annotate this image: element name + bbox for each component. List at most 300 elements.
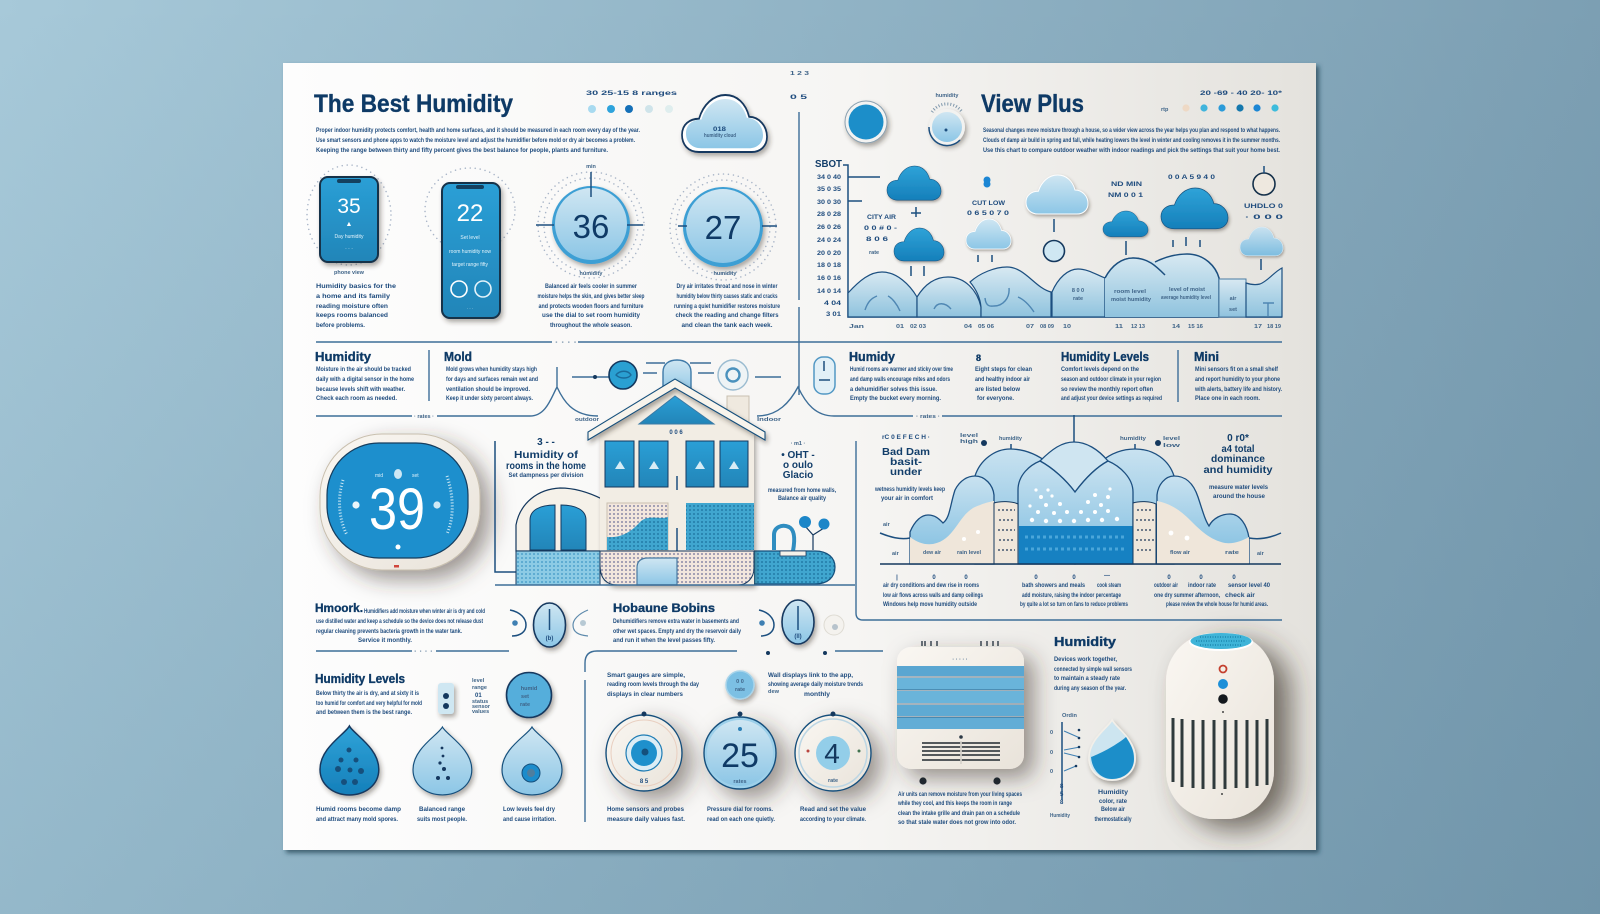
callout: humidity of rooms: rooms in the home [506,461,586,472]
connector curves: · rates · [414,414,434,420]
text block: Mold [444,349,538,402]
chart: humidity domes: outdoor air [1154,582,1178,589]
legend: humidity scale right: 20 -69 - 40 20- 10* [1200,91,1283,97]
pool [754,551,835,584]
text block: Humidy: Empty the bucket every morning. [850,395,941,402]
icon: pill sensor right [759,600,844,644]
device: air conditioner: · · · · · [952,657,968,663]
frame: lower middle [585,651,883,822]
chart: humidity domes: wetness humidity levels keep [874,486,945,493]
button icon [845,101,887,143]
centre line and ticks [1011,415,1135,449]
y axis labels: 28 0 28 [817,212,842,218]
callout: right of house: Balance air quality [778,495,826,502]
text block: Moisture: use distilled water and keep a schedule so the device does not release dust [316,618,484,625]
y axis labels: 24 0 24 [817,238,842,244]
text block: Humidity Levels lower: Below thirty the air is dry, and at sixty it is [316,690,419,697]
captions: dials: measure daily values fast. [607,816,685,823]
chart: humidity domes: low air flows across walls and damp ceilings [883,592,983,599]
chart: humidity domes: your air in comfort [881,495,934,502]
chart: humidity domes: rate [1225,550,1239,556]
caption: dial 27 [674,283,780,329]
dial 36: humidity [580,271,603,277]
caption: drop: color, rate [1099,798,1127,805]
chart: humidity domes: dominance [1211,454,1265,465]
chart: humidity domes: cook steam [1097,582,1121,589]
callout: humidity of rooms: 3 - - [537,437,555,448]
chart: humidity domes: sensor level 40 [1228,582,1270,589]
text block: Humidity Levels: season and outdoor climate in your region [1061,376,1161,383]
hills [848,272,917,317]
caption: dial 36: and protects wooden floors and furniture [538,303,644,310]
house illustration: 0 0 6 [669,430,683,436]
chart: weather clouds and humidity area: rate [869,250,879,256]
device: air conditioner [897,641,1024,785]
intro text right [983,127,1280,154]
dial 27: humidity [714,271,737,277]
text pair with mini gauge: reading room levels through the day [607,681,699,688]
icon: pill sensor left: (b) [546,636,553,642]
text block: Moisture: regular cleaning prevents bacteria growth in the water tank. [316,628,462,635]
left chart text: rC 0 E F E C H · [882,435,930,441]
dial 36 [536,164,644,278]
caption: dial 27: humidity below thirty causes static and cracks [676,293,778,300]
captions: drops: Humid rooms become damp [316,806,401,813]
scale: drop level: 5 [1060,792,1064,798]
caption: dial 27: check the reading and change filters [676,312,779,319]
text block: Humidity Levels: Humidity Levels [1061,349,1149,364]
chart: weather clouds and humidity area: UHDLO 0 [1244,204,1284,210]
caption: dial 27: running a quiet humidifier restores moisture [674,303,780,310]
chart: weather clouds and humidity area: 0 0 A 5 9 4 0 [1168,175,1216,181]
text pair with mini gauge: Wall displays link to the app, [768,672,853,679]
chart: humidity domes: 0 [1034,575,1038,581]
house illustration [516,379,835,585]
right chart text: 0 r0* [1227,433,1249,444]
chart: weather clouds and humidity area: 17 [1254,324,1262,330]
chart: weather clouds and humidity area: 12 13 [1131,324,1145,330]
chart: humidity domes: Bad Dam [882,447,930,458]
chart: humidity domes: — [1104,573,1110,579]
chart: humidity domes: high [960,439,979,445]
icon: round meter: set [521,694,529,700]
roof [588,379,765,440]
connector curves [316,367,1282,423]
y axis labels: 20 0 20 [817,251,842,257]
chart: humidity domes: 0 [932,575,936,581]
chart: humidity domes: rain level [957,550,981,556]
caption: drop: thermostatically [1094,816,1132,823]
lower panels [607,503,668,550]
y axis labels: 16 0 16 [817,276,842,282]
connector curves: Indoor [757,417,782,423]
icon: phone tall: · · · [466,306,474,311]
callout: right of house: · m1 · [791,441,806,447]
icon: small sensor: level [472,678,485,684]
chart: weather clouds and humidity area [815,159,1284,330]
text block: Mold: Keep it under sixty percent always. [446,395,533,402]
text block: Humidity Levels: so review the monthly report often [1061,386,1153,393]
text block: 8: 8 [976,353,981,363]
text block: Humidity: because levels shift with weather. [316,386,405,393]
caption: phone small: a home and its family [316,293,390,300]
connector curves: outdoor [575,417,600,423]
y axis labels: 35 0 35 [817,187,842,193]
captions: drops: and cause irritation. [503,816,556,823]
text block: Humidy [849,349,953,402]
dial 36: min [586,164,597,170]
text block: Humidy: and damp walls encourage mites and odors [850,376,950,383]
scale: drop level: 8 [1060,800,1064,806]
dial: eye [606,712,682,791]
x axis labels: Jan [849,324,865,330]
dial: four [795,712,871,791]
vertical divider small [428,350,430,401]
cloud labels: CITY AIR [867,215,897,221]
icon: small sensor: status [472,699,488,705]
divider top centre: 1 2 3 [790,71,809,77]
chart: weather clouds and humidity area: CUT LOW [972,201,1005,207]
chart: humidity domes: a4 total [1222,444,1255,455]
chart: weather clouds and humidity area: 15 16 [1188,324,1203,330]
chart: humidity domes: low [1163,443,1181,449]
caption: phone small: reading moisture often [316,303,388,310]
icon: phone small: Day humidity [335,234,364,240]
caption: dial 27: Dry air irritates throat and nose in winter [676,283,778,290]
text block: Mold: Mold [444,349,472,364]
chart: weather clouds and humidity area: moist humidity [1111,297,1152,303]
chart: humidity domes: air [1257,551,1265,557]
caption: phone small: Humidity basics for the [316,283,396,290]
chart: humidity domes: add moisture, raising the indoor percentage [1022,592,1121,599]
rain arrows and small icons [911,207,1261,276]
text block: Humidity: Check each room as needed. [316,395,397,402]
chart: humidity domes: 0 [964,575,968,581]
chart: humidity domes: 0 [1199,575,1203,581]
chart: weather clouds and humidity area: 04 [964,324,973,330]
icon: round meter: rate [520,702,530,708]
text block: 8: Eight steps for clean [975,366,1032,373]
text block: Moisture [315,601,485,644]
chart: humidity domes: dew air [923,550,942,556]
drop: dark [320,726,379,795]
icon: small sensor: values [472,709,489,715]
y axis labels: 26 0 26 [817,225,842,231]
text block: Mold: ventilation should be improved. [446,386,530,393]
sun dial icon [1044,240,1064,262]
left mid hill [910,476,994,564]
text block: Humidity Levels lower: and between them is the best range. [316,709,412,716]
scale: drop level: Humidity [1050,813,1071,819]
text pair with mini gauge: showing average daily moisture trends [768,681,863,688]
text block: Moisture: Humidifiers add moisture when winter air is dry and cold [364,608,485,615]
text block: Humidity: Humidity [315,349,372,364]
text pair with mini gauge: Smart gauges are simple, [607,672,685,679]
centre arch [1018,461,1133,564]
icon: phone tall: target range fifty [452,262,489,268]
text block: Hobaune Bobins: other wet spaces. Empty and dry the reservoir daily [613,628,741,635]
icon: round meter [506,672,552,718]
text block: Humidity Levels lower: Humidity Levels [315,671,405,686]
clouds [887,166,941,200]
y axis labels: 14 0 14 [817,289,842,295]
text block: Hobaune Bobins: Hobaune Bobins [613,601,715,615]
chart: weather clouds and humidity area: 01 [896,324,904,330]
chart: weather clouds and humidity area: ND MIN [1111,182,1142,188]
heading: View Plus: View Plus [981,90,1084,118]
callout: humidity of rooms: Set dampness per division [508,472,584,479]
device: humidifier [1166,633,1274,819]
callout: right of house: • OHT - [781,450,815,461]
text block: Mini: Mini [1194,349,1219,364]
text block: Hobaune Bobins: and run it when the level passes fifty. [613,637,715,644]
chart: humidity domes: Windows help move humidity outside [883,601,977,608]
y axis labels [815,159,842,318]
text block: Hobaune Bobins: Dehumidifiers remove extra water in basements and [613,618,739,625]
caption: drop [1094,789,1132,823]
caption: phone small [316,283,396,329]
icon: small sensor: 01 [475,693,482,699]
captions: drops: suits most people. [417,816,467,823]
chart: weather clouds and humidity area: 02 03 [910,324,926,330]
chart: weather clouds and humidity area: 07 [1026,324,1034,330]
icon: cloud badge: 018 [713,127,727,133]
frame line around mountain chart [495,441,1282,620]
icon: phone small: phone view [334,270,365,276]
y axis labels: 30 0 30 [817,200,842,206]
callout: right of house [768,441,836,502]
scale: drop level: 0 [1050,750,1053,756]
chart: weather clouds and humidity area: 14 [1172,324,1181,330]
chart: weather clouds and humidity area: · 0 0 0 [1245,215,1284,221]
intro text left: Keeping the range between thirty and fifty percent gives the best balance for people, plants and furniture. [316,147,608,154]
chart: weather clouds and humidity area: 11 [1115,324,1123,330]
caption: air conditioner: while they cool, and this keeps the room in range [897,800,1012,807]
drop: light one [413,727,472,795]
chart: humidity domes: please review the whole house for humid areas. [1166,601,1268,608]
caption: phone small: before problems. [316,322,365,329]
right pillar [1133,502,1156,564]
plant [774,526,794,551]
right mid hill [1157,476,1249,564]
text pair with mini gauge: rate [735,687,745,693]
icon: phone tall: Set level [460,235,480,241]
connector curves: · rates · [916,414,940,420]
text block: 8: and healthy indoor air [975,376,1030,383]
scale: drop level [1050,713,1080,819]
text pair with mini gauge: dew [768,689,780,695]
chart: weather clouds and humidity area: rate [1073,296,1083,302]
dial: eye: 8 5 [640,779,649,785]
chart: weather clouds and humidity area: 0 0 # 0 - [864,226,897,232]
chart: humidity domes: air [892,551,900,557]
wing lines [880,533,1281,539]
legend: humidity scale right [1161,91,1283,113]
body [600,388,754,585]
text block: 8: for everyone. [977,395,1014,402]
y axis labels: 18 0 18 [817,263,842,269]
caption: drop: Below air [1101,806,1125,813]
icon: phone small [307,165,391,276]
thermostat 39: 39 [369,477,425,542]
text pair with mini gauge: monthly [804,691,830,698]
text block: Humidity Levels: Comfort levels depend on the [1061,366,1139,373]
text block: Mold: Mold grows when humidity stays high [446,366,537,373]
text block: Humidity: daily with a digital sensor in the home [316,376,414,383]
drop: level indicator [1089,720,1135,780]
text block: Humidity [315,349,414,402]
callout: humidity of rooms: Humidity of [514,450,579,461]
chart: humidity domes: level [1163,436,1181,442]
text block: Humidity: Moisture in the air should be tracked [316,366,411,373]
text block: Humidity right: connected by simple wall sensors [1054,666,1132,673]
caption: air conditioner: so that stale water does not grow into odor. [898,819,1016,826]
left pillar [994,502,1018,564]
captions: dials [607,806,866,823]
caption: dial 36: use the dial to set room humidity [542,312,640,319]
chart: humidity domes: 0 [1167,575,1171,581]
text block: Humidity right: Devices work together, [1054,656,1117,663]
back domes [975,449,1075,564]
scale: drop level: 0 [1050,769,1053,775]
divider top centre [790,71,809,101]
text block: Mini: Mini sensors fit on a small shelf [1195,366,1279,373]
text block: Humidy: Humid rooms are warmer and sticky over time [850,366,953,373]
chart: humidity domes: by quite a lot so turn on fans to reduce problems [1020,601,1128,608]
caption: dial 27: and clean the tank each week. [682,322,773,329]
chart: weather clouds and humidity area: 0 6 5 0 7 0 [967,211,1010,217]
intro text left: Use smart sensors and phone apps to watch the moisture level and adjust the humidifier before mold or dry air becomes a problem. [316,137,635,144]
text block: Mini: with alerts, battery life and history. [1194,386,1282,393]
icons row above house [572,357,835,395]
icon: phone tall: room humidity now [449,249,491,255]
text block: Mold: for days and surfaces remain wet and [446,376,538,383]
caption: air conditioner: Air units can remove moisture from your living spaces [898,791,1022,798]
y axis labels: 3 01 [826,312,842,318]
caption: dial 36: throughout the whole season. [550,322,632,329]
chart: humidity domes: 0 [1232,575,1236,581]
thermostat 39: mid [375,473,383,479]
chart: weather clouds and humidity area: room level [1114,289,1147,295]
dial: 25: 25 [721,737,759,775]
dots on beige [976,530,980,534]
thermostat 39: set [412,473,419,479]
horizontal rule upper: · · · · [555,340,577,346]
icon: phone tall [425,168,515,318]
dial: four: rate [828,778,838,784]
white droplets [1028,487,1119,523]
chart: humidity domes: check air [1225,592,1256,599]
hill marks [865,288,1274,316]
chart: humidity domes: basit- [890,457,922,468]
text block: Mini: Place one in each room. [1195,395,1260,402]
icon: phone small: ▲ [346,221,352,228]
rule lower left: · · · · [414,649,433,655]
text block: Moisture: Service it monthly. [358,637,412,644]
text block: Humidity right: Humidity [1054,634,1117,649]
legend: humidity scale right: rtp [1161,107,1169,113]
dial: four: 4 [824,738,840,769]
callout: right of house: Glacio [783,470,813,481]
captions: dials: Read and set the value [800,806,866,813]
icon: phone small: 35 [337,195,361,218]
text pair with mini gauge [607,671,863,699]
caption: air conditioner [897,791,1022,826]
icon: phone tall: 22 [457,200,483,227]
chart: weather clouds and humidity area: 08 09 [1040,324,1054,330]
dial: 25: rates [733,779,747,785]
thermostat 39 [320,434,480,570]
captions: dials: Pressure dial for rooms. [707,806,773,813]
chart: weather clouds and humidity area: air [1230,296,1237,302]
icon: small sensor: range [472,685,487,691]
text block: Humidy: a dehumidifier solves this issue. [850,386,937,393]
chart: weather clouds and humidity area: 18 19 [1267,324,1281,330]
chart: weather clouds and humidity area: 10 [1063,324,1071,330]
captions: dials: Home sensors and probes [607,806,684,813]
legend: humidity scale left: 30 25-15 8 ranges [586,91,678,97]
chart: humidity domes: under [890,467,922,478]
intro text left: Proper indoor humidity protects comfort, health and home surfaces, and it should be measured in each room every day of the year. [316,127,640,134]
chart: humidity domes: flow air [1170,550,1191,556]
text block: Humidity right [1054,634,1132,692]
captions: dials: according to your climate. [800,816,866,823]
icon: phone small: · · · [345,246,353,252]
text block: 8 [975,353,1032,402]
y axis labels: 4 04 [824,301,842,307]
text block: Hobaune Bobins [613,601,741,644]
icon: pill sensor left [510,603,588,647]
chart: weather clouds and humidity area: 8 0 0 [1072,288,1084,294]
small dial icon [929,93,965,146]
icon: small sensor [438,678,491,715]
icon: cloud badge: humidity cloud [704,133,736,139]
legend: humidity scale left [586,91,678,113]
axes [843,165,1282,317]
upper windows [605,441,634,487]
intro text right: Clouds of damp air build in spring and fall, while heating lowers the level in winter and cooling removes it in the summer months. [983,137,1280,144]
water text specks [1025,537,1125,549]
dial 36: 36 [573,208,609,245]
caption: dial 36 [538,283,645,329]
title: The Best Humidity [314,90,513,118]
text block: Humidity Levels: and adjust your device settings as required [1061,395,1162,402]
caption: drop: Humidity [1098,789,1128,796]
intro text right: Seasonal changes move moisture through a house, so a wider view across the year helps you plan and respond to what happens. [983,127,1280,134]
scale: drop level: 0 [1050,730,1053,736]
indicator row: | [896,575,898,581]
caption: dial 36: moisture helps the skin, and gives better sleep [538,293,645,300]
captions: drops: Low levels feel dry [503,806,555,813]
text block: Humidity right: during any season of the year. [1054,685,1126,692]
chart: weather clouds and humidity area: NM 0 0 1 [1108,193,1144,199]
caption: dial 36: Balanced air feels cooler in summer [545,283,637,290]
text block: Humidity Levels lower: too humid for comfort and very helpful for mold [316,700,422,707]
chart: humidity domes: air [883,522,891,528]
chart: weather clouds and humidity area: level of moist [1169,287,1205,293]
y axis labels: 34 0 40 [817,175,842,181]
intro text left [316,127,640,154]
intro text right: Use this chart to compare outdoor weather with indoor readings and pick the settings that suit your home best. [983,147,1280,154]
text pair with mini gauge: 0 0 [736,679,744,685]
icon: cloud badge [682,95,767,152]
chimney [727,396,749,431]
vertical divider [798,112,800,395]
caption: air conditioner: clean the intake grille and drain pan on a schedule [898,810,1020,817]
icon: pill sensor right: (ll) [794,634,802,640]
chart: weather clouds and humidity area: 05 06 [978,324,994,330]
dial 27 [670,174,777,280]
